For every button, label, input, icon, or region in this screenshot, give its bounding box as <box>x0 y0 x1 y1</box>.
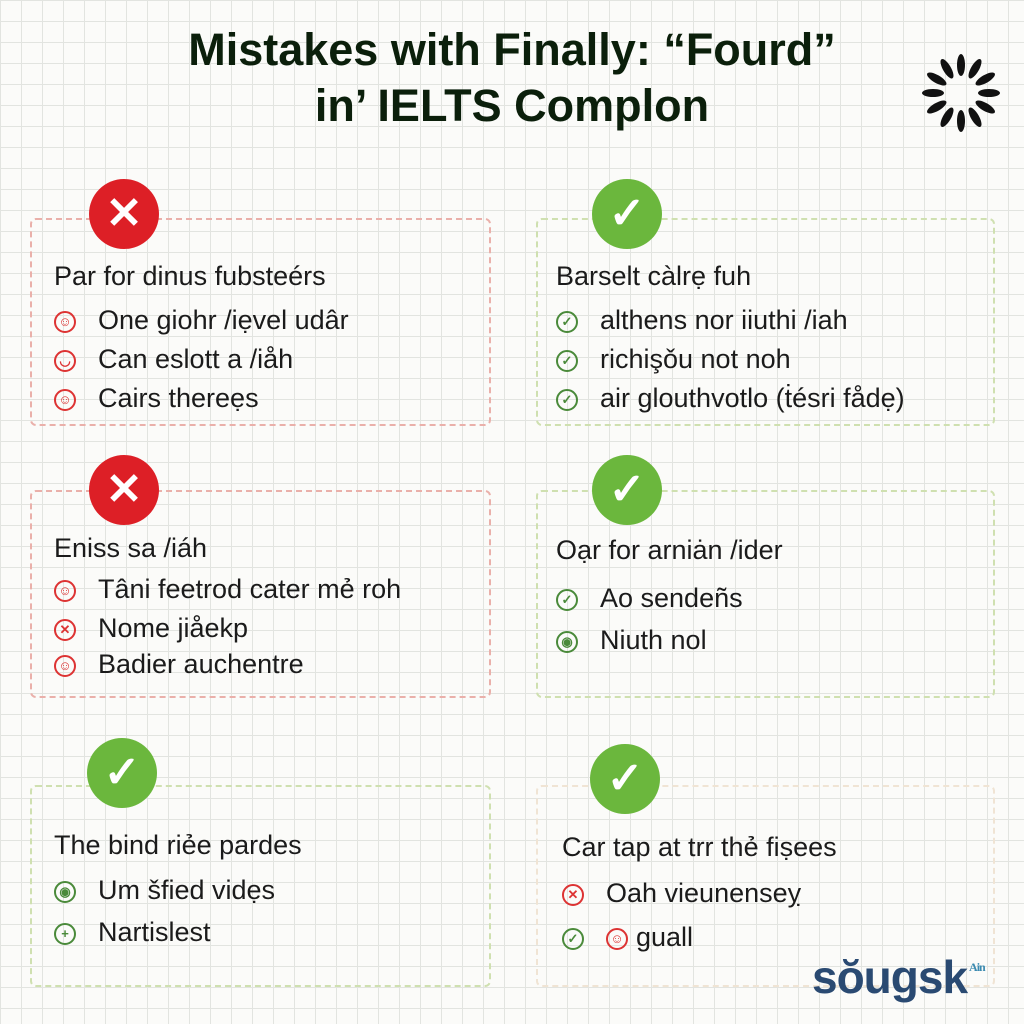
text block: panel 1: ☺ <box>58 392 72 407</box>
icon: red cross 2: ✕ <box>106 465 142 514</box>
text block: panel 1: Can eslott a /iåh <box>98 344 293 374</box>
text block: panel 3: ✕ <box>60 622 70 637</box>
text block: panel 1: ◡ <box>59 353 71 368</box>
text block: panel 3 <box>54 533 401 679</box>
text block: panel 5: The bind riẻe pardes <box>54 830 302 860</box>
text block: panel 4: Ao sendeñs <box>600 583 743 613</box>
icon: green check 2 <box>592 455 662 525</box>
text block: panel 1 <box>54 261 349 413</box>
text block: panel 1: Par for dinus fubsteérs <box>54 261 326 291</box>
title: Mistakes with Finally: “Fourd” <box>188 24 836 75</box>
text block: panel 6: ☺ <box>610 931 624 946</box>
panel: correct 1 <box>536 218 995 426</box>
text block: panel 1: ☺ <box>58 314 72 329</box>
icon: green check 1: ✓ <box>609 189 645 238</box>
text block: panel 4: Oạr for arniȧn /ider <box>556 535 783 565</box>
panel: mistake 1 <box>30 218 491 426</box>
text block: panel 1: One giohr /iẹvel udâr <box>98 305 349 335</box>
text block: panel 6: Oah vieunenseỵ <box>606 878 801 908</box>
logo: sŏugskAin <box>812 951 985 1003</box>
panel: mistake 2 <box>30 490 491 698</box>
text block: panel 2: air glouthvotlo (ṫésri fådẹ) <box>600 383 905 413</box>
text block: panel 4 <box>556 535 783 655</box>
text block: panel 4: Niuth nol <box>600 625 707 655</box>
icon: green check 2: ✓ <box>609 465 645 514</box>
text block: panel 6: guall <box>636 922 693 952</box>
text block: panel 3: Eniss sa /iáh <box>54 533 207 563</box>
text block: panel 5: Um šfied vidẹs <box>98 875 275 905</box>
icon: sunburst <box>922 54 1000 132</box>
icon: green check 4 <box>590 744 660 814</box>
text block: panel 6 <box>562 832 837 952</box>
icon: green check 3 <box>87 738 157 808</box>
text block: panel 3: Badier auchentre <box>98 649 304 679</box>
text block: panel 2: ✓ <box>562 353 572 368</box>
text block: panel 2 <box>556 261 905 413</box>
text block: panel 4: ✓ <box>562 592 572 607</box>
text block: panel 5: Nartislest <box>98 917 211 947</box>
text block: panel 4: ◉ <box>561 634 573 649</box>
icon: green check 1 <box>592 179 662 249</box>
panel: correct 3 <box>30 785 491 987</box>
text block: panel 2: ✓ <box>562 392 572 407</box>
text block: panel 6: ✕ <box>568 887 578 902</box>
title <box>188 24 836 131</box>
text block: panel 1: Cairs thereẹs <box>98 383 259 413</box>
text block: panel 6: ✓ <box>568 931 578 946</box>
icon: green check 4: ✓ <box>607 754 643 803</box>
text block: panel 2: Barselt càlrẹ fuh <box>556 261 751 291</box>
text block: panel 5: ◉ <box>59 884 71 899</box>
title: in’ IELTS Complon <box>315 80 709 131</box>
icon: green check 3: ✓ <box>104 748 140 797</box>
text block: panel 3: Nome jiåekp <box>98 613 248 643</box>
text block: panel 2: althens nor iiuthi /iah <box>600 305 848 335</box>
text block: panel 3: ☺ <box>58 583 72 598</box>
text block: panel 3: Tâni feetrod cater mẻ roh <box>98 574 401 604</box>
panel: correct 4 <box>536 785 995 987</box>
text block: panel 5: + <box>61 926 69 941</box>
text block: panel 6: Car tap at trr thẻ fiṣees <box>562 832 837 862</box>
icon: red cross 1: ✕ <box>106 189 142 238</box>
text block: panel 2: richişǒu not noh <box>600 344 791 374</box>
icon: red cross 1 <box>89 179 159 249</box>
text block: panel 3: ☺ <box>58 658 72 673</box>
text block: panel 2: ✓ <box>562 314 572 329</box>
panel: correct 2 <box>536 490 995 698</box>
text block: panel 5 <box>54 830 302 947</box>
icon: red cross 2 <box>89 455 159 525</box>
